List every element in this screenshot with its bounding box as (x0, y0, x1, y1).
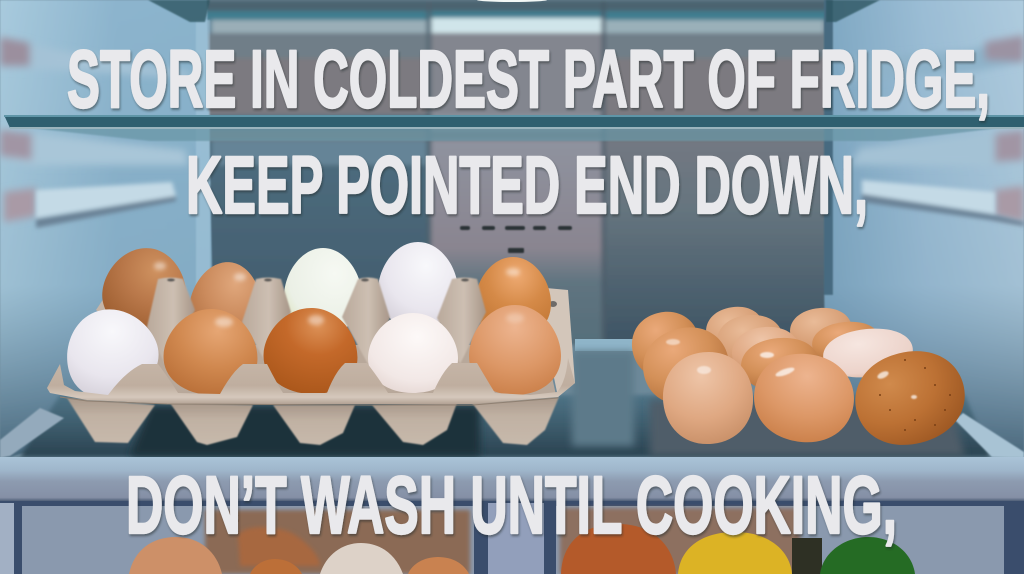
left wall rails (0, 37, 190, 222)
back wall (205, 0, 830, 345)
overhead light (477, 0, 547, 2)
right wall rails (845, 35, 1024, 222)
lower drawers (0, 501, 1024, 574)
back wall vent dashes (460, 226, 572, 253)
carton left corner (96, 298, 108, 320)
left wall lower rail (36, 182, 176, 228)
back row of eggs (98, 242, 551, 348)
top shelf brackets (148, 0, 210, 22)
lower glass shelf surface (0, 339, 1024, 458)
right wall (824, 0, 1024, 460)
carton cones (147, 278, 486, 364)
glass shelf (4, 115, 1024, 141)
right wall lower rail (862, 180, 1024, 226)
loose brown eggs (626, 303, 974, 456)
egg highlights (154, 262, 524, 327)
shelf front lip (0, 457, 1024, 501)
eggs in drawers (129, 508, 915, 574)
carton cups (67, 397, 559, 445)
egg glints (666, 339, 917, 399)
front row of eggs (52, 262, 561, 411)
egg speckles (879, 359, 951, 431)
carton right side wall (540, 288, 575, 397)
left wall (0, 0, 212, 460)
carton back base (110, 345, 556, 395)
carton rim and peaks (47, 358, 575, 405)
